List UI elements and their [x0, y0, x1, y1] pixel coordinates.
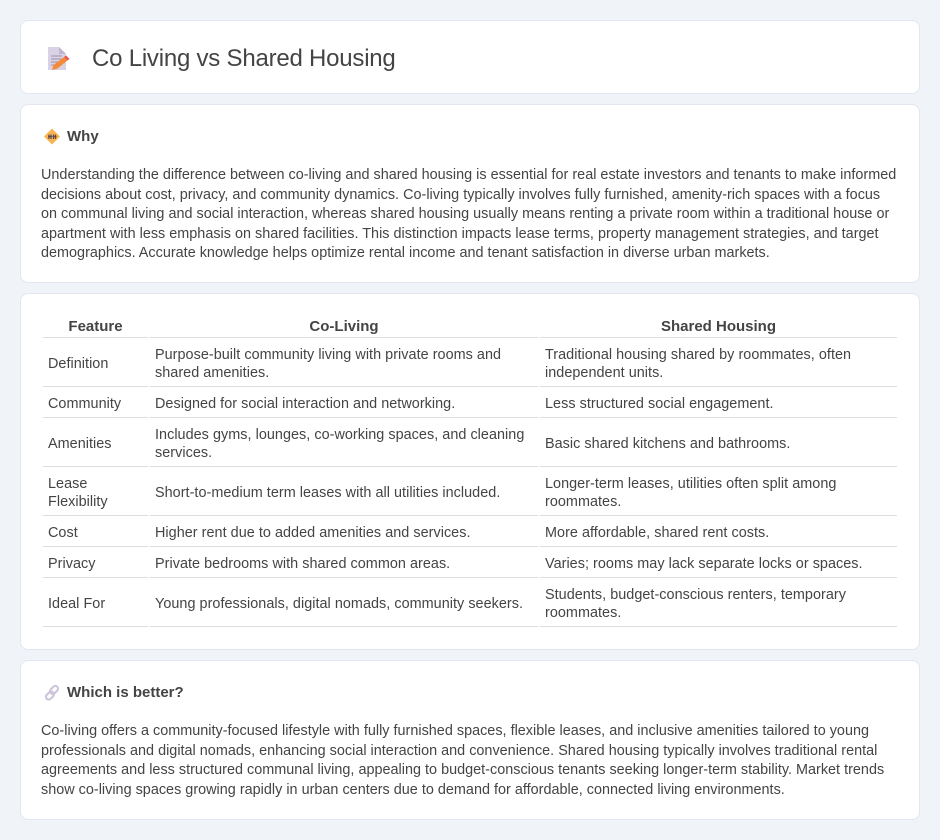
- comparison table: Ideal For: [48, 596, 105, 612]
- comparison table: Students, budget-conscious renters, temporary: [545, 587, 846, 603]
- text block: verdict: agreements and less structured communal living, appealing to budget-conscious tenants seeking longer-term stability. Market trends: [41, 762, 884, 778]
- comparison table: Includes gyms, lounges, co-working spaces, and cleaning: [155, 427, 524, 443]
- comparison table: Designed for social interaction and networking.: [155, 396, 455, 412]
- comparison table: services.: [155, 445, 212, 461]
- comparison table: Co-Living: [309, 318, 379, 335]
- comparison table: Cost: [48, 525, 78, 541]
- comparison table: Feature: [68, 318, 123, 335]
- text block: why explanation: [41, 167, 896, 261]
- text block: verdict: Co-living offers a community-focused lifestyle with fully furnished spaces, flexible leases, and inclusive amenities tailored to young: [41, 723, 869, 739]
- comparison table: More affordable, shared rent costs.: [545, 525, 769, 541]
- panel: comparison table: [20, 293, 920, 650]
- icon: diamond sign: [44, 128, 60, 144]
- comparison table: Basic shared kitchens and bathrooms.: [545, 436, 790, 452]
- text block: verdict: show co-living spaces growing rapidly in urban centers due to demand for affordable, connected living environments.: [41, 782, 785, 798]
- comparison table: roommates.: [545, 494, 621, 510]
- panel: why: [20, 104, 920, 283]
- text block: why explanation: Understanding the difference between co-living and shared housing is essential for real estate investors and tenants to make informed: [41, 167, 896, 183]
- text block: why explanation: apartment with less emphasis on shared facilities. This distinction impacts lease terms, property management strategies, and target: [41, 226, 879, 242]
- comparison table: roommates.: [545, 605, 621, 621]
- text block: verdict: [41, 723, 884, 798]
- comparison table: Privacy: [48, 556, 95, 572]
- comparison table: Shared Housing: [661, 318, 776, 335]
- comparison table: Purpose-built community living with private rooms and: [155, 347, 501, 363]
- icon: chain link: [44, 684, 60, 701]
- comparison table: independent units.: [545, 365, 663, 381]
- comparison table: Community: [48, 396, 121, 412]
- text block: why explanation: on communal living and social interaction, whereas shared housing usually means renting a private room within a traditional house or: [41, 206, 889, 222]
- text block: why explanation: decisions about cost, privacy, and community dynamics. Co-living typically involves fully furnished, amenity-rich spaces with a focus: [41, 186, 880, 202]
- icon: memo with pencil: [48, 47, 70, 70]
- heading: which is better: Which is better?: [67, 684, 184, 701]
- comparison table: Higher rent due to added amenities and services.: [155, 525, 470, 541]
- comparison table: shared amenities.: [155, 365, 269, 381]
- comparison table: [43, 318, 897, 627]
- text block: why explanation: demographics. Accurate knowledge helps optimize rental income and tenant satisfaction in diverse urban markets.: [41, 245, 770, 261]
- panel: title header: [20, 20, 920, 94]
- panel: which is better: [20, 660, 920, 820]
- comparison table: Young professionals, digital nomads, community seekers.: [155, 596, 523, 612]
- title: Co Living vs Shared Housing: [92, 45, 396, 72]
- comparison table: Definition: [48, 356, 108, 372]
- comparison table: Less structured social engagement.: [545, 396, 774, 412]
- comparison table: Flexibility: [48, 494, 108, 510]
- comparison table: Longer-term leases, utilities often split among: [545, 476, 836, 492]
- comparison table: Lease: [48, 476, 87, 492]
- comparison table: Varies; rooms may lack separate locks or spaces.: [545, 556, 863, 572]
- heading: why: Why: [67, 128, 99, 145]
- comparison table: Short-to-medium term leases with all utilities included.: [155, 485, 500, 501]
- comparison table: Amenities: [48, 436, 112, 452]
- text block: verdict: professionals and digital nomads, enhancing social interaction and convenience. Shared housing typically involves traditional rental: [41, 742, 877, 758]
- comparison table: Private bedrooms with shared common areas.: [155, 556, 450, 572]
- comparison table: Traditional housing shared by roommates, often: [545, 347, 851, 363]
